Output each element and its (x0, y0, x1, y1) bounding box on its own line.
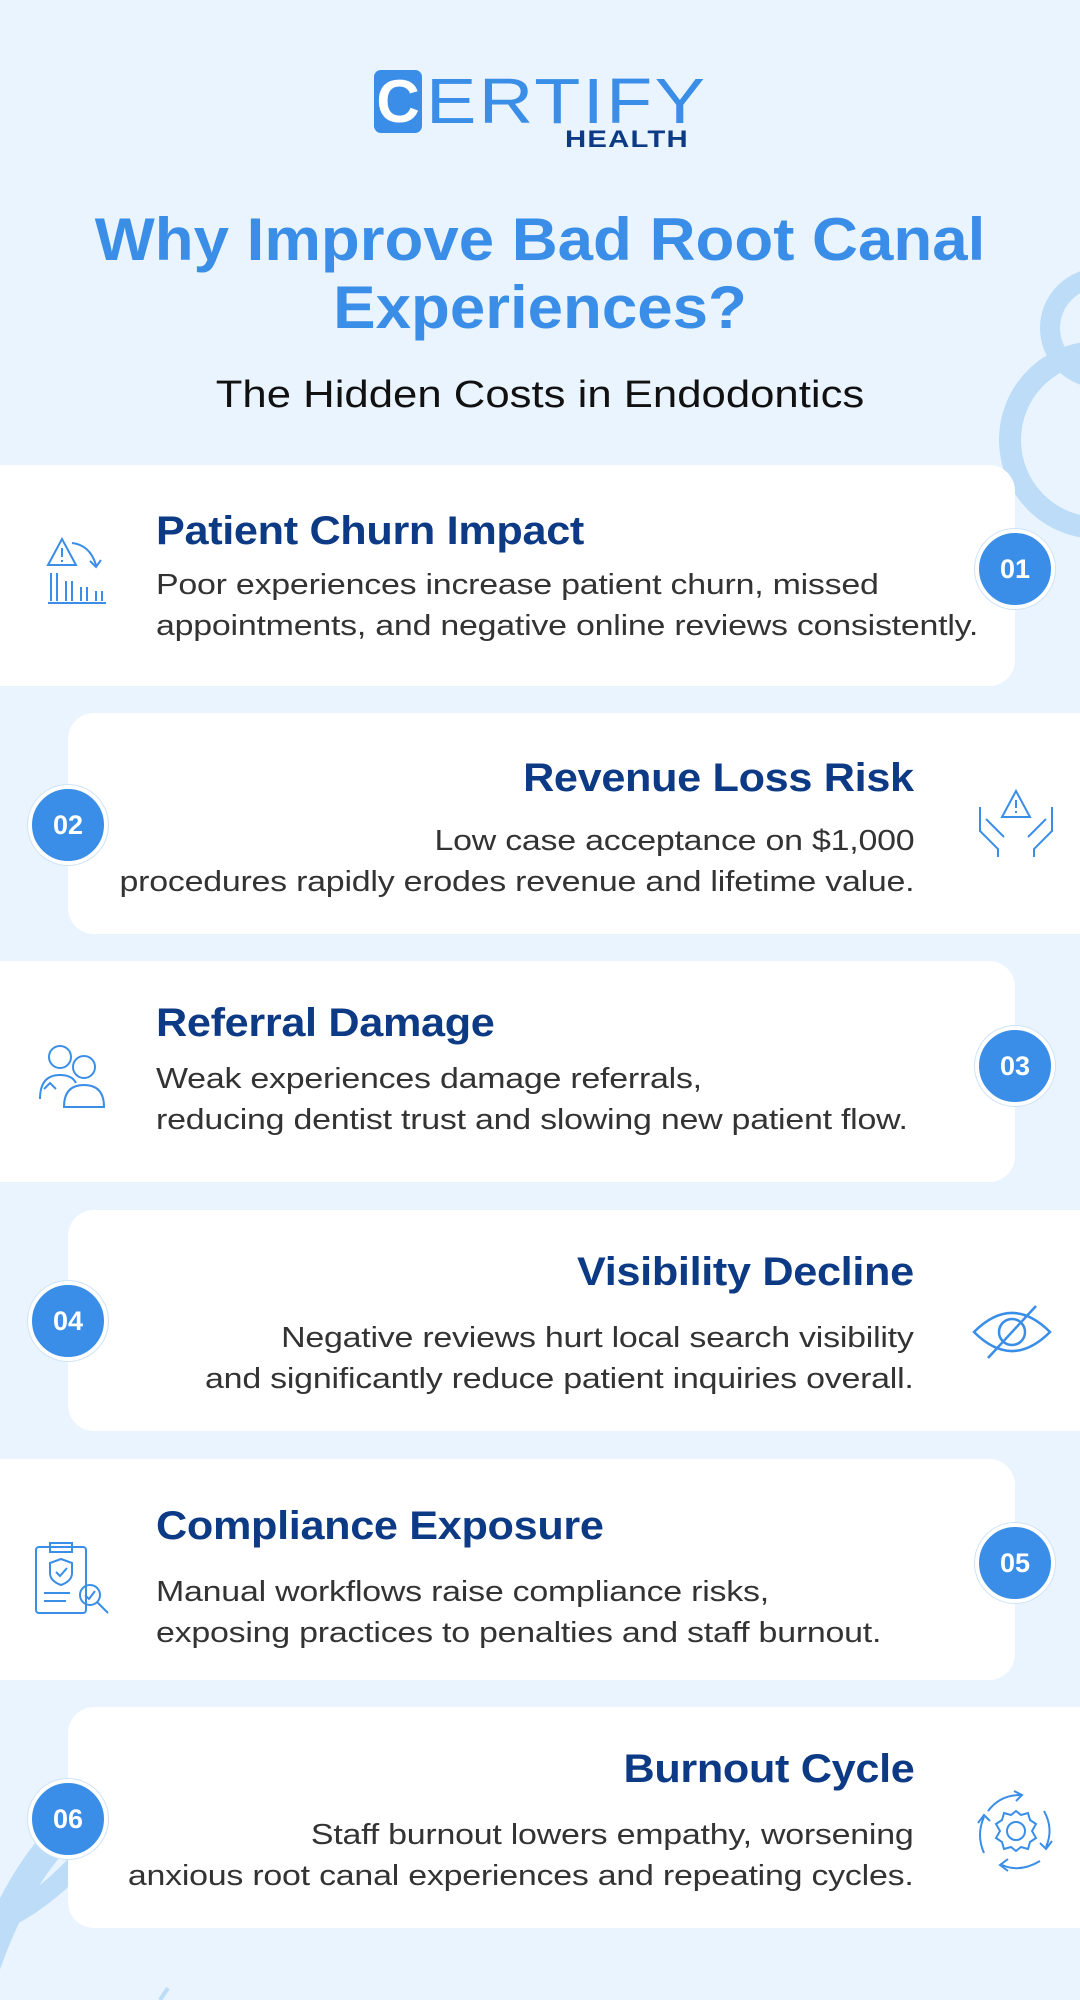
number 04: 04 (53, 1306, 83, 1336)
panel: 02 revenue (68, 713, 1080, 934)
title: Why Improve Bad Root Canal (95, 206, 985, 273)
title: Experiences? (333, 274, 747, 341)
body: Manual workflows raise compliance risks, (156, 1576, 769, 1608)
body: anxious root canal experiences and repeating cycles. (128, 1860, 914, 1892)
panel: 01 patient churn (0, 465, 1015, 686)
number 05: 05 (1000, 1548, 1030, 1578)
body (128, 1819, 914, 1892)
number 02: 02 (53, 810, 83, 840)
body: procedures rapidly erodes revenue and lifetime value. (119, 866, 914, 898)
heading: Patient Churn Impact (156, 509, 584, 553)
panel: 06 burnout (68, 1707, 1080, 1928)
number 03: 03 (1000, 1050, 1030, 1080)
body (205, 1322, 914, 1395)
number 01 (975, 529, 1055, 609)
heading: Burnout Cycle (623, 1747, 914, 1791)
icon: people (39, 1045, 105, 1108)
heading: Revenue Loss Risk (523, 756, 914, 800)
panel: 05 compliance (0, 1459, 1015, 1680)
body: Low case acceptance on $1,000 (434, 825, 914, 857)
subtitle: The Hidden Costs in Endodontics (216, 374, 864, 416)
number 05 (975, 1523, 1055, 1603)
icon: clipboard check (35, 1542, 109, 1614)
icon: hands warning (979, 789, 1053, 857)
body: appointments, and negative online reviews consistently. (156, 610, 978, 642)
logo: ERTIFY (426, 65, 707, 137)
number 01: 01 (1000, 554, 1030, 584)
number 02 (28, 785, 108, 865)
body: exposing practices to penalties and staff burnout. (156, 1617, 881, 1649)
heading: Compliance Exposure (156, 1504, 604, 1548)
body: Negative reviews hurt local search visibility (281, 1322, 914, 1354)
body (119, 825, 914, 898)
heading: Visibility Decline (577, 1250, 914, 1294)
number 06 (28, 1779, 108, 1859)
number 04 (28, 1281, 108, 1361)
heading: Referral Damage (156, 1001, 495, 1045)
title (94, 206, 985, 341)
body (156, 1576, 881, 1649)
body: and significantly reduce patient inquiries overall. (205, 1363, 914, 1395)
icon: chart warning (46, 537, 106, 604)
number 06: 06 (53, 1804, 83, 1834)
panel: 03 referral (0, 961, 1015, 1182)
panel: 04 visibility (68, 1210, 1080, 1431)
body: Poor experiences increase patient churn, missed (156, 569, 879, 601)
logo: C (376, 68, 420, 135)
icon: eye slash (972, 1305, 1052, 1359)
logo: HEALTH (565, 126, 689, 153)
body: reducing dentist trust and slowing new patient flow. (156, 1104, 908, 1136)
number 03 (975, 1026, 1055, 1106)
icon: gear cycle (977, 1790, 1053, 1872)
body: Staff burnout lowers empathy, worsening (311, 1819, 914, 1851)
body (156, 1063, 908, 1136)
logo (374, 65, 707, 153)
body (156, 569, 978, 642)
body: Weak experiences damage referrals, (156, 1063, 702, 1095)
